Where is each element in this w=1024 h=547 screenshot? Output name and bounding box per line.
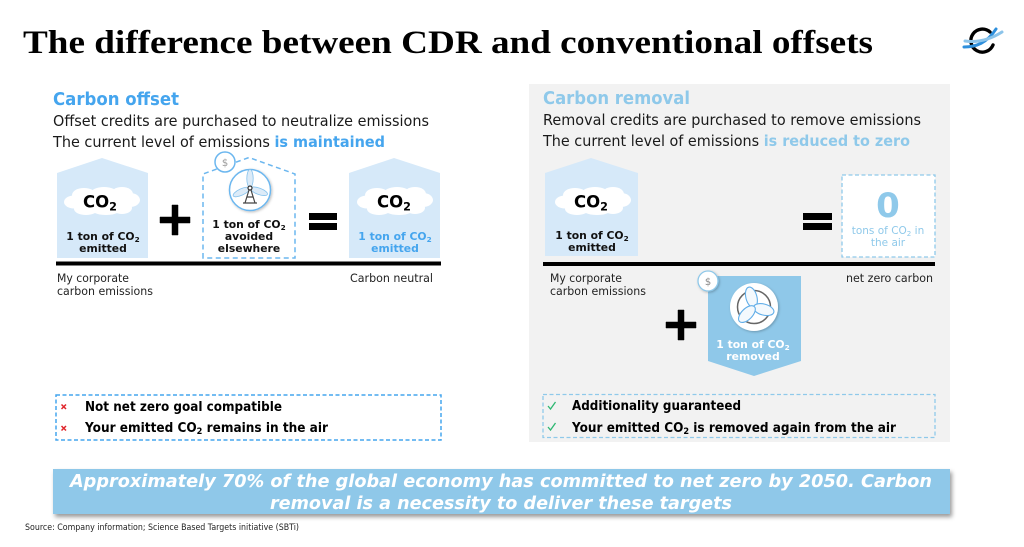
callout: offset drawbacks	[56, 395, 441, 440]
house: 1 ton emitted: 1 ton of CO	[555, 229, 624, 242]
icon: company logo	[964, 29, 1002, 52]
heading: carbon removal: Carbon removal	[543, 88, 690, 109]
text: offset outcome: The current level of emissions is maintained	[52, 133, 385, 151]
house: 1 ton emitted: CO	[83, 192, 109, 212]
house: avoided elsewhere: elsewhere	[218, 242, 280, 255]
icon: fan	[730, 283, 778, 331]
ribbon: 1 ton removed: 2	[785, 343, 790, 352]
banner: key message: Approximately 70% of the global economy has committed to net zero by 2050. Carbon	[68, 471, 932, 492]
house: avoided elsewhere	[203, 152, 295, 258]
house: 1 ton emitted: emitted	[79, 242, 127, 255]
label: my corporate carbon emissions: carbon emissions	[57, 284, 153, 298]
banner: key message	[53, 469, 950, 514]
icon: wind turbine	[230, 170, 270, 210]
label: net zero carbon: net zero carbon	[846, 271, 933, 285]
house: 1 ton emitted: 1 ton of CO	[66, 230, 135, 243]
house: avoided elsewhere: 2	[281, 223, 286, 232]
house: carbon neutral: CO	[377, 192, 403, 212]
baseline bar	[56, 262, 441, 266]
source note: Source: Company information; Science Based Targets initiative (SBTi)	[25, 523, 299, 533]
callout: removal benefits: Your emitted CO	[572, 421, 692, 436]
box: zero tons: 2	[907, 229, 911, 238]
callout: offset drawbacks: Your emitted CO	[85, 421, 205, 436]
callout: removal benefits: Additionality guaranteed	[572, 399, 741, 414]
ribbon: 1 ton removed: 1 ton of CO	[716, 338, 785, 351]
heading: carbon offset: Carbon offset	[53, 89, 179, 110]
panel: carbon offset	[52, 89, 441, 440]
label: my corporate carbon emissions: My corporate	[57, 271, 129, 285]
icon: equals	[309, 213, 337, 230]
house: 1 ton emitted: 2	[135, 235, 140, 244]
box: zero tons: 0	[876, 186, 900, 226]
house: 1 ton emitted: emitted	[568, 241, 616, 254]
house: 1 ton emitted: 2	[109, 200, 117, 214]
house: 1 ton emitted: 2	[624, 234, 629, 243]
house: carbon neutral	[349, 158, 440, 258]
icon: plus	[666, 310, 696, 340]
label: carbon neutral: Carbon neutral	[350, 271, 433, 285]
callout: removal benefits: is removed again from the air	[689, 421, 897, 436]
house: carbon neutral: 2	[427, 235, 432, 244]
icon: plus	[160, 205, 190, 235]
box: zero tons: the air	[871, 237, 906, 249]
callout: offset drawbacks: remains in the air	[202, 421, 329, 436]
text: removal outcome: The current level of emissions is reduced to zero	[542, 132, 910, 150]
ribbon: 1 ton removed	[698, 271, 801, 376]
house: carbon neutral: 2	[403, 200, 411, 214]
house: 1 ton emitted	[545, 158, 638, 256]
box: zero tons	[842, 175, 935, 257]
label: my corporate carbon emissions: My corporate	[550, 271, 622, 285]
callout: offset drawbacks: Not net zero goal compatible	[85, 400, 282, 415]
icon: equals	[803, 213, 832, 230]
house: carbon neutral: 1 ton of CO	[358, 230, 427, 243]
box: zero tons: in	[911, 225, 924, 237]
banner: key message: removal is a necessity to deliver these targets	[270, 493, 732, 514]
icon: dollar coin: $	[222, 158, 228, 169]
panel: carbon removal	[529, 84, 950, 442]
text: removal description: Removal credits are purchased to remove emissions	[543, 111, 921, 129]
icon: dollar coin: $	[705, 277, 711, 288]
label: my corporate carbon emissions: carbon emissions	[550, 284, 646, 298]
callout: offset drawbacks: 2	[197, 427, 202, 437]
ribbon: 1 ton removed: removed	[726, 350, 780, 363]
callout: removal benefits	[543, 394, 935, 438]
house: 1 ton emitted	[57, 158, 148, 258]
text: offset description: Offset credits are purchased to neutralize emissions	[53, 112, 429, 130]
house: carbon neutral: emitted	[371, 242, 419, 255]
house: 1 ton emitted: 2	[600, 200, 608, 214]
house: avoided elsewhere: 1 ton of CO	[212, 218, 281, 231]
house: 1 ton emitted: CO	[574, 192, 600, 212]
callout: removal benefits: 2	[683, 427, 689, 437]
baseline bar	[543, 262, 935, 266]
house: avoided elsewhere: avoided	[225, 230, 273, 243]
title: The difference between CDR and conventional offsets	[23, 25, 873, 61]
box: zero tons: tons of CO	[852, 225, 907, 237]
